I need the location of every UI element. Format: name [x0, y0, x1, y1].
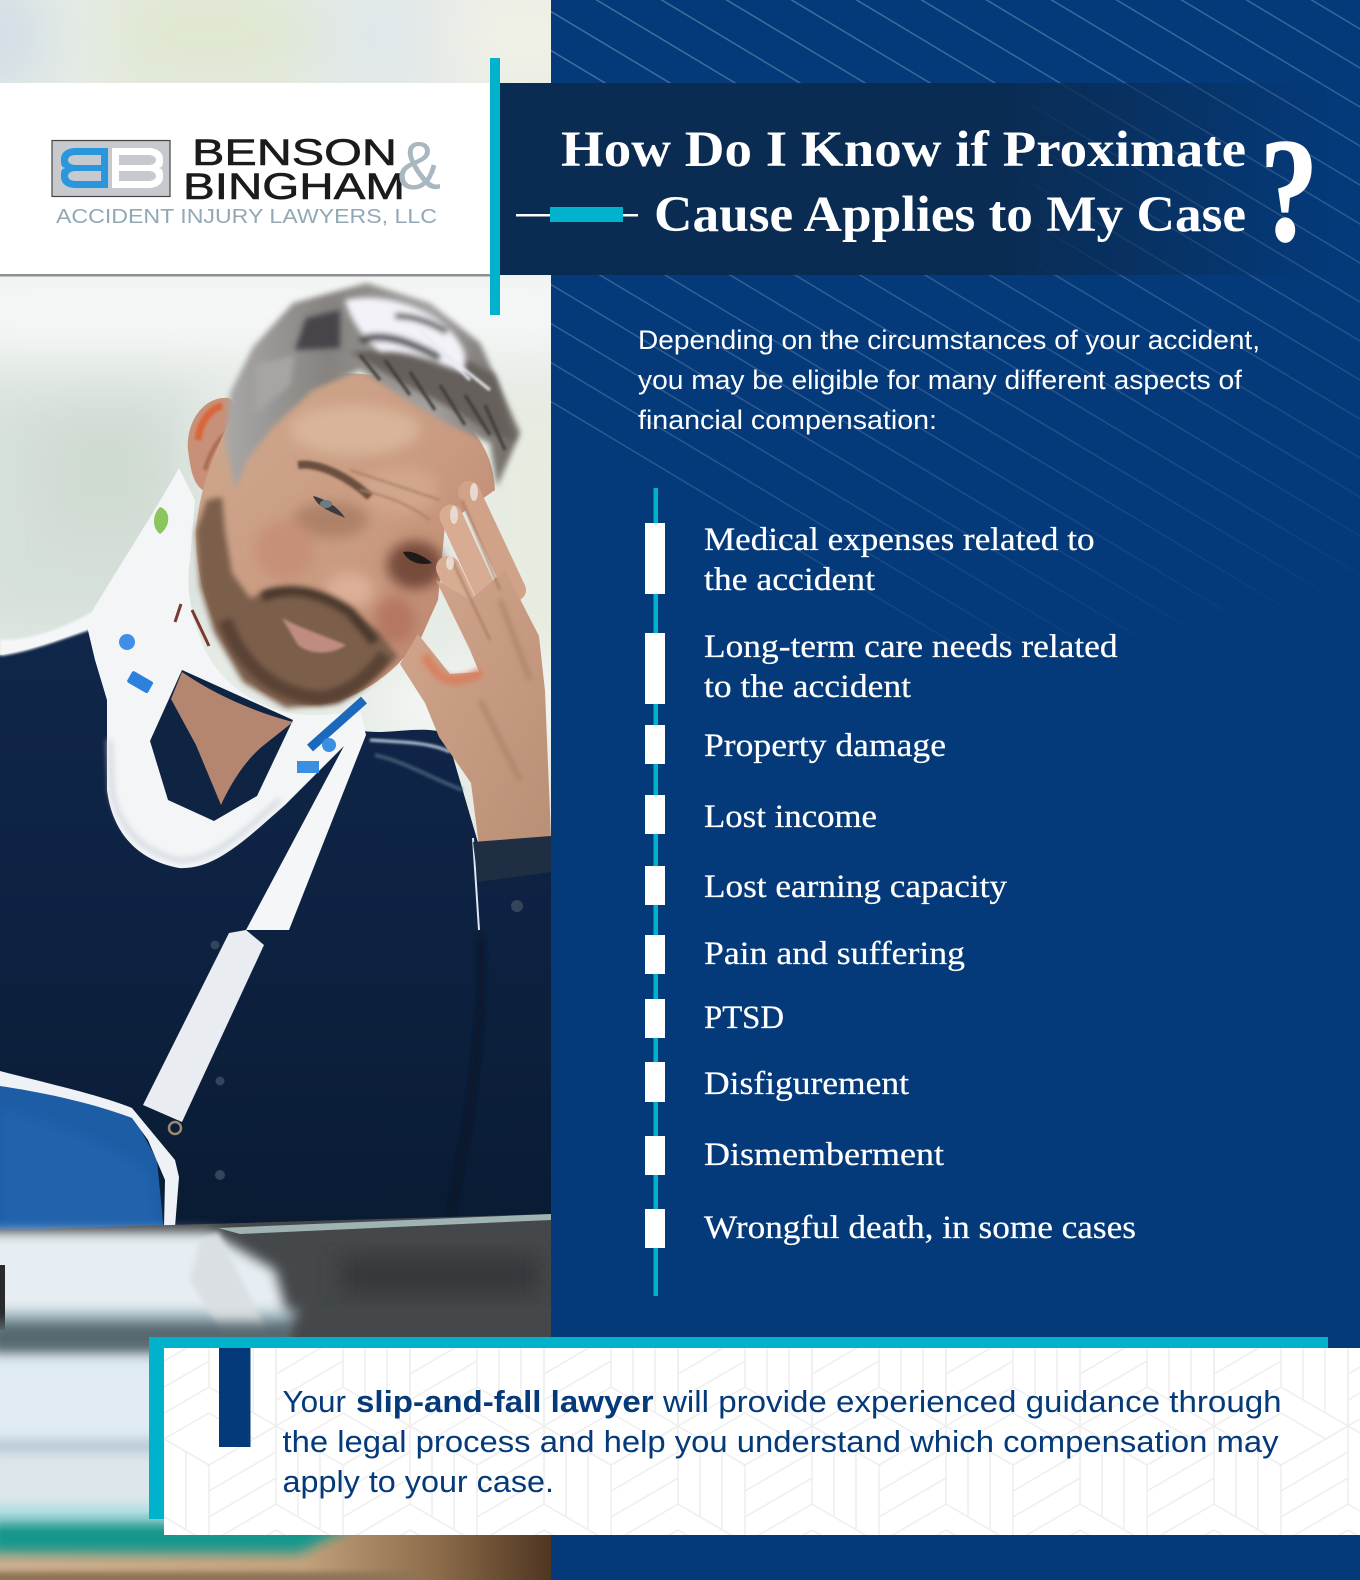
teal callout frame	[149, 1337, 1328, 1519]
intro paragraph: Depending on the circumstances of your accident,	[638, 325, 1260, 355]
logo wordmark	[56, 128, 441, 228]
shoulder highlight	[0, 612, 92, 656]
navy accent bar	[219, 1348, 250, 1447]
item: medical expenses	[645, 522, 1094, 598]
item: long-term care: Long-term care needs related	[704, 629, 1118, 665]
item: long-term care	[645, 629, 1118, 705]
large question mark: ?	[1260, 109, 1318, 273]
lower glass reflection	[0, 1344, 149, 1354]
strap reflection	[191, 1229, 264, 1328]
item: lost income: Lost income	[704, 799, 877, 835]
compensation list	[645, 488, 1136, 1296]
timeline line	[654, 488, 658, 1296]
table edge line	[218, 1214, 551, 1234]
navy background panel	[551, 0, 1360, 1580]
neck	[171, 672, 293, 805]
item: property damage	[645, 725, 946, 764]
fingers	[448, 492, 515, 640]
item: PTSD	[645, 999, 784, 1038]
callout panel	[149, 1337, 1360, 1535]
item: long-term care: to the accident	[704, 669, 911, 705]
fingernails	[446, 483, 478, 570]
sling strap	[246, 714, 366, 930]
item: dismemberment: Dismemberment	[704, 1137, 944, 1173]
glass table	[0, 1229, 551, 1337]
item: disfigurement: Disfigurement	[704, 1066, 909, 1102]
intro paragraph: financial compensation:	[638, 405, 937, 435]
intro paragraph: you may be eligible for many different aspects of	[638, 365, 1243, 395]
item: lost income	[645, 795, 877, 835]
shirt buttons	[210, 900, 523, 1180]
neck brace	[86, 468, 362, 868]
mouth	[282, 618, 346, 652]
brace inner opening	[150, 670, 293, 821]
title	[561, 122, 1246, 243]
callout text: apply to your case.	[282, 1464, 554, 1499]
blurred window background	[0, 0, 600, 730]
hair band near forehead	[350, 345, 515, 440]
item: medical expenses: the accident	[704, 562, 875, 598]
ear	[188, 398, 233, 490]
item: lost earning capacity: Lost earning capacity	[704, 869, 1008, 905]
title: Cause Applies to My Case	[654, 187, 1246, 243]
brace markers	[119, 634, 135, 650]
item: medical expenses: Medical expenses related to	[704, 522, 1094, 558]
item: pain and suffering: Pain and suffering	[704, 936, 965, 972]
photo: injured man in neck brace at a glass table	[0, 0, 600, 1580]
hair highlight patches	[255, 298, 466, 415]
intro paragraph	[638, 325, 1260, 435]
item: dismemberment	[645, 1136, 944, 1175]
title banner	[500, 83, 1340, 275]
shirt	[0, 628, 551, 1232]
hair	[225, 283, 520, 490]
logo band	[0, 83, 490, 276]
item: disfigurement	[645, 1062, 909, 1102]
teal vertical accent bar	[490, 58, 500, 315]
logo wordmark: BENSON	[192, 132, 397, 173]
item: wrongful death: Wrongful death, in some cases	[704, 1210, 1136, 1246]
callout text	[282, 1384, 1282, 1499]
item: PTSD: PTSD	[704, 1000, 784, 1036]
callout text: will provide experienced guidance through	[662, 1384, 1282, 1419]
table edge post	[0, 1265, 5, 1330]
item: property damage: Property damage	[704, 728, 946, 764]
sleeve details	[473, 838, 479, 930]
callout text: slip-and-fall lawyer	[356, 1384, 654, 1419]
cuff	[473, 836, 551, 882]
face shading	[255, 405, 443, 644]
logo wordmark: BINGHAM	[183, 166, 405, 207]
logo icon: BB monogram	[52, 140, 170, 196]
beard	[196, 497, 398, 708]
face	[196, 373, 495, 705]
arm sling	[0, 1084, 164, 1233]
item: pain and suffering	[645, 935, 965, 974]
title: How Do I Know if Proximate	[561, 122, 1246, 178]
hand	[400, 483, 551, 846]
wood table edge	[0, 1530, 551, 1580]
callout text: Your	[282, 1384, 346, 1419]
callout text: the legal process and help you understand which compensation may	[282, 1424, 1279, 1459]
logo wordmark: ACCIDENT INJURY LAWYERS, LLC	[56, 206, 437, 228]
diagonal stripe pattern	[0, 0, 1360, 647]
title dash accent	[516, 207, 638, 222]
logo wordmark: &	[397, 128, 441, 204]
eyes and brows	[298, 465, 440, 564]
